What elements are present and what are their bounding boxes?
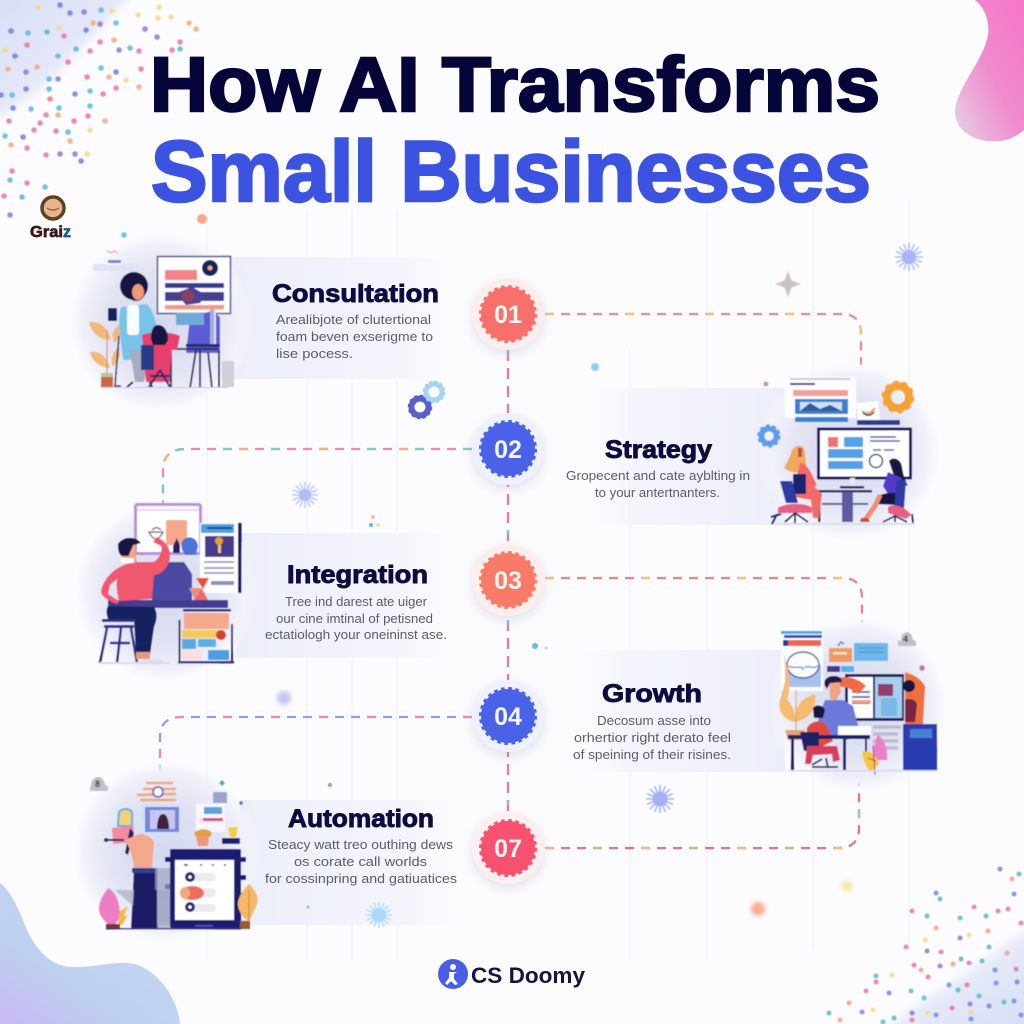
number badge 07: 07 [494,835,522,863]
number badge 01: 01 [494,301,522,329]
main title [150,42,880,220]
connector: 07 to right column [545,775,859,848]
description: to your antertnanters. [595,485,720,500]
number badge 04 [472,680,544,752]
heading: Automation [288,805,434,833]
icon: sparkle cross [777,273,799,295]
description: for cossinpring and gatiuatices [265,871,458,886]
number badge 02: 02 [494,436,522,464]
description [276,312,433,361]
number badge 07 [472,812,544,884]
number badge 02 [472,413,544,485]
description: foam beven exserigme to [276,329,433,344]
illustration: growth office: 4 [903,634,908,644]
soft accent dots [197,214,853,916]
heading: Integration [287,561,428,589]
step 01: Consultation [68,230,544,414]
pink blob top right [955,0,1024,141]
connector: vertical spine [507,350,509,814]
illustration: automation dashboard [71,758,259,946]
description: Tree ind darest ate uiger [285,594,428,609]
icon: snowflake left [292,482,318,508]
title line 2: Small Businesses [151,124,871,220]
illustration: strategy meeting [758,360,942,544]
description: orhertior right derato feel [574,730,731,745]
description: Steacy watt treo outhing dews [268,837,454,852]
title line 1: How AI Transforms [150,42,880,128]
logo: Graiz: z [63,224,71,241]
step 07: Automation [71,758,544,946]
heading: Strategy [605,436,712,464]
brand name: CS Doomy [471,963,586,988]
connector: 04 to left column [160,717,472,782]
confetti dots bottom right [829,869,1021,1022]
description: Decosum asse into [597,713,711,728]
icon: snowflake top right [895,243,923,271]
description: of speining of their risines. [573,747,731,762]
footer logo: CS Doomy [438,959,586,989]
panel [235,533,470,658]
description [265,594,447,642]
number badge 01 [472,278,544,350]
illustration: growth office [768,615,948,795]
decorative snowflakes, gears and dots [197,214,923,928]
logo: Graiz [30,197,71,241]
connector: 02 to left column [163,449,472,510]
icon: figure in blue circle [438,959,468,989]
confetti dots top left [1,5,196,235]
icon: snowflake bottom [366,902,392,928]
step 02: Strategy [472,360,942,544]
description [265,837,458,886]
panel [240,800,480,925]
description [566,468,750,500]
panel [570,388,785,525]
panel [232,257,472,379]
icon: snowflake centre [646,785,674,813]
heading: Growth [602,680,702,708]
step 04: Growth [472,615,948,795]
icon: gear navy [409,396,431,418]
logo: Graiz: Grai [30,224,63,241]
dashed connector timeline [160,314,862,848]
description: os corate call worlds [294,854,428,869]
description: Arealibjote of clutertional [276,312,431,327]
number badge 03: 03 [494,567,522,595]
illustration: integration workstation [73,500,257,684]
description: Gropecent and cate ayblting in [566,468,750,483]
heading: Consultation [272,280,439,308]
step 03: Integration [73,500,544,684]
icon: gear light blue [424,382,444,402]
connector: 01 to right column [545,314,861,365]
description: ectatiologh your oneininst ase. [265,627,447,642]
description: lise pocess. [276,346,353,361]
connector: 03 to right column [545,578,862,622]
number badge 03 [472,544,544,616]
description: our cine imtinal of petisned [276,611,433,626]
number badge 04: 04 [494,703,522,731]
illustration: consultation team [68,230,252,414]
panel [560,650,785,772]
description [573,713,731,762]
illustration: automation dashboard: 8 [95,779,100,789]
blue blob bottom left [0,883,180,1024]
